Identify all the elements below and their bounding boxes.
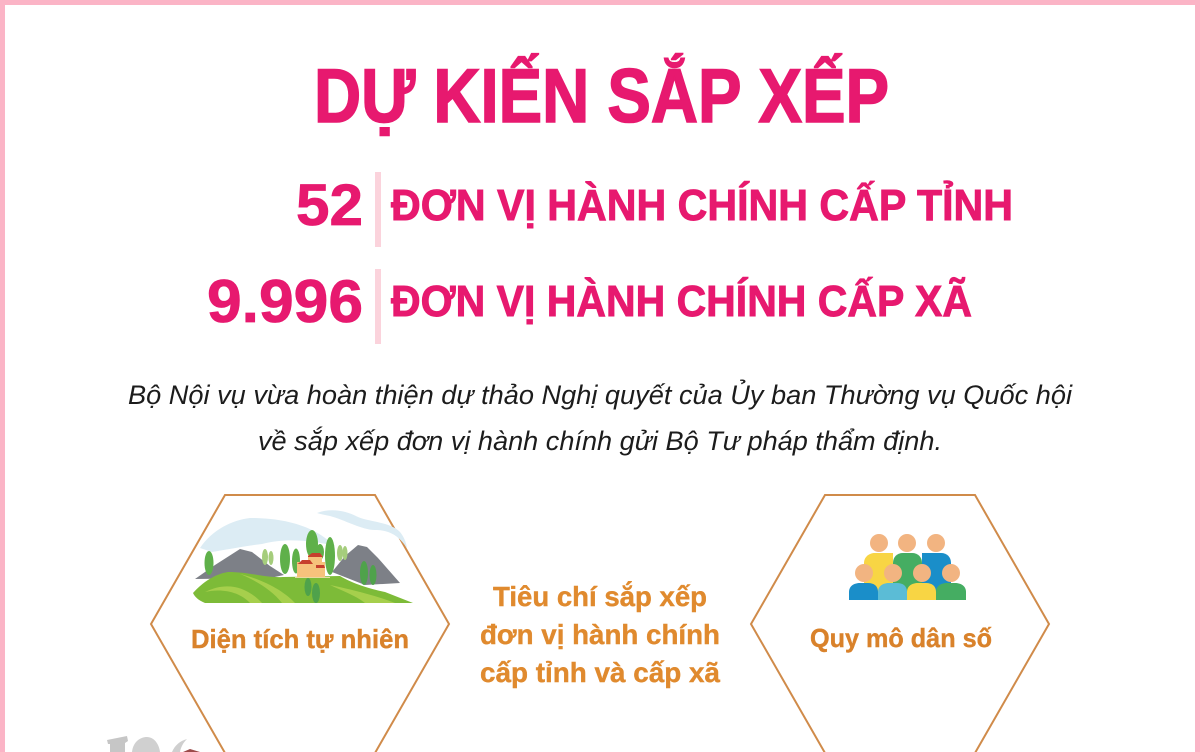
label: ĐƠN VỊ HÀNH CHÍNH CẤP XÃ bbox=[391, 276, 972, 326]
intro paragraph bbox=[128, 377, 1073, 456]
intro paragraph: về sắp xếp đơn vị hành chính gửi Bộ Tư pháp thẩm định. bbox=[258, 425, 942, 456]
label: Diện tích tự nhiên bbox=[191, 624, 409, 654]
stat row: 52 provincial units bbox=[296, 172, 1013, 247]
panel: natural area bbox=[151, 495, 449, 752]
icon: landscape bbox=[193, 510, 413, 603]
stat row: 9.996 commune units bbox=[207, 268, 972, 344]
title: DỰ KIẾN SẮP XẾP bbox=[314, 53, 889, 139]
divider bbox=[375, 172, 381, 247]
icon: cropped column and dome at bottom edge bbox=[107, 736, 200, 752]
center heading: criteria bbox=[480, 581, 720, 688]
number: 9.996: 9.996 bbox=[207, 268, 363, 335]
hexagon outline bbox=[751, 495, 1049, 752]
center heading: criteria: Tiêu chí sắp xếp bbox=[493, 581, 707, 612]
label: Quy mô dân số bbox=[810, 623, 992, 653]
icon: group of people bbox=[849, 534, 966, 600]
hexagon outline bbox=[151, 495, 449, 752]
label: ĐƠN VỊ HÀNH CHÍNH CẤP TỈNH bbox=[391, 180, 1013, 230]
center heading: criteria: đơn vị hành chính bbox=[480, 619, 720, 650]
panel: population size bbox=[751, 495, 1049, 752]
number: 52: 52 bbox=[296, 173, 363, 238]
divider bbox=[375, 269, 381, 344]
intro paragraph: Bộ Nội vụ vừa hoàn thiện dự thảo Nghị quyết của Ủy ban Thường vụ Quốc hội bbox=[128, 377, 1073, 410]
center heading: criteria: cấp tỉnh và cấp xã bbox=[480, 657, 720, 688]
